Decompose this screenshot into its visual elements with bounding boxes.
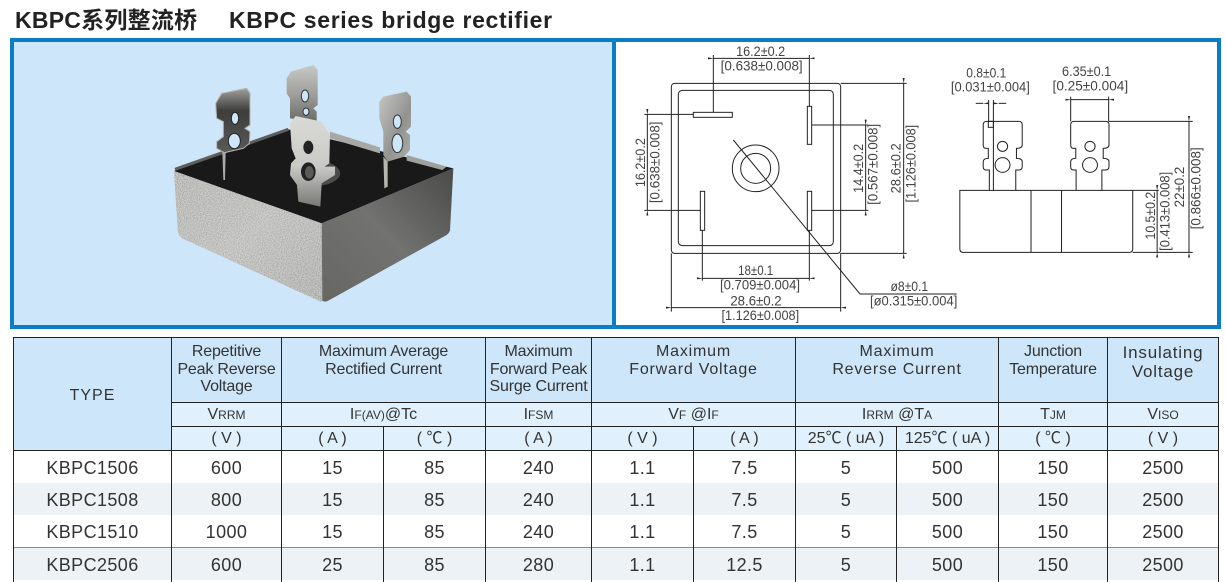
row: KBPC1508: 15 [322,490,343,510]
row: KBPC2506: 5 [841,555,851,575]
row: KBPC2506: 1.1 [629,555,656,575]
dimension: overall width: [1.126±0.008] [721,307,799,323]
product photo: bridge rectifier [174,65,453,302]
table header: parameter names: Voltage [1132,362,1194,381]
table header: units: ( A ) [524,430,553,446]
dimension: body height [1142,172,1172,252]
specification table [13,337,1219,582]
table header: parameter names: Rectified Current [325,360,442,378]
table header: parameter names [14,338,1218,580]
table header: units: ( V ) [211,430,242,446]
row: KBPC1508: KBPC1508 [46,490,139,510]
dimension: outer right height [841,83,918,253]
title: KBPC系列整流桥 [15,7,197,33]
row: KBPC1506: 85 [424,458,445,478]
row: KBPC1506: 5 [841,458,851,478]
dimension: hole diameter leader: ø8±0.1 [890,278,928,294]
row: KBPC1506: 1.1 [629,458,656,478]
dimension: terminal thickness: 0.8±0.1 [966,64,1006,80]
dimension: hole diameter leader [733,140,957,308]
table header: parameter names: Reverse Current [832,360,962,378]
table header: parameter names: Repetitive [192,343,261,360]
row: KBPC2506: 85 [424,555,445,575]
panel: product and drawing frame [10,38,1221,329]
row: KBPC1510: 2500 [1142,522,1184,542]
row: KBPC1510: 7.5 [731,522,758,542]
table header: symbols: VF @IF [668,406,719,422]
dimension: terminal spacing [702,230,809,292]
row: KBPC1508 [14,483,1218,515]
table header: parameter names: Maximum [656,343,731,360]
row: KBPC1510: 15 [322,522,343,542]
table header: parameter names: Maximum Average [319,343,448,360]
table header: units: ( ℃ ) [417,430,452,446]
row: KBPC1506: 150 [1037,458,1069,478]
row: KBPC2506: 12.5 [726,555,763,575]
panel divider [612,38,616,329]
table header: units: ( A ) [730,430,759,446]
row: KBPC2506: 600 [211,555,242,575]
row: KBPC2506: 500 [932,555,963,575]
table header: units: ( V ) [627,430,658,446]
row: KBPC1508: 85 [424,490,445,510]
row: KBPC1506: 240 [523,458,554,478]
body outline [960,190,1193,252]
table header: parameter names: Temperature [1009,360,1097,378]
dimension: terminal spacing: [0.709±0.004] [720,276,800,292]
dimension: hole diameter leader: [ø0.315±0.004] [870,292,957,308]
dimension: left height [632,114,700,210]
table header: parameter names: Junction [1024,343,1082,360]
table header: symbols: VRRM [208,406,246,422]
row: KBPC1510: 500 [932,522,963,542]
terminal: front [290,116,335,207]
dimension drawing: side view [951,63,1204,252]
dimension: outer right height: [1.126±0.008] [902,125,918,202]
dimension: body height: 10.5±0.2 [1142,192,1158,239]
row: KBPC1510: 240 [523,522,554,542]
row: KBPC1510: 1.1 [629,522,656,542]
terminal: back right [379,92,411,188]
row: KBPC1506: 7.5 [731,458,758,478]
row: KBPC1508: 1.1 [629,490,656,510]
dimension: outer right height: 28.6±0.2 [888,143,904,193]
dimension: terminal width: [0.25±0.004] [1053,78,1128,94]
body outlines [671,83,841,253]
table header: units: ( A ) [318,430,347,446]
dimension: top width [713,43,809,112]
dimension: terminal thickness [951,64,1030,121]
dimension: terminal spacing: 18±0.1 [738,262,773,278]
dimension drawing: top view [632,43,957,323]
table header: symbols: IRRM @TA [862,406,932,422]
dimension: terminal thickness: [0.031±0.004] [951,79,1030,95]
dimension: inner right height: [0.567±0.008] [865,124,881,205]
table header: symbols: IF(AV)@Tc [350,406,417,422]
table header: parameter names: Insulating [1123,343,1203,362]
row: KBPC1508: 500 [932,490,963,510]
table header: units: ( V ) [1148,430,1178,446]
table header: parameter names: Voltage [200,378,252,395]
centre washer [290,161,340,186]
dimension: left height: [0.638±0.008] [646,121,662,203]
row: KBPC1510: 150 [1037,522,1069,542]
left terminal outline [983,121,1022,190]
dimension: total height [1109,121,1204,252]
title [15,7,553,33]
table header: symbols: TJM [1040,406,1066,422]
dimension: overall width: 28.6±0.2 [730,292,782,308]
row: KBPC1508: 240 [523,490,554,510]
dimension: overall width [671,253,841,323]
row: KBPC1506: 2500 [1142,458,1184,478]
dimension: top width: [0.638±0.008] [721,58,803,74]
dimension: left height: 16.2±0.2 [632,138,648,187]
row: KBPC1510 [46,522,1184,542]
body right face [322,168,453,302]
table header: parameter names: Peak Reverse [177,360,276,378]
dimension: terminal width [1053,63,1128,121]
right terminal outline [1071,121,1109,190]
dimension: total height: [0.866±0.008] [1187,147,1204,229]
body left face [174,171,322,302]
dimension: inner right height [812,124,881,210]
metal rods at back rim [330,132,447,170]
table header: parameter names: Forward Peak [490,360,587,378]
row: KBPC2506: 25 [322,555,343,575]
row: KBPC1508: 7.5 [731,490,758,510]
row: KBPC1506: 15 [322,458,343,478]
table header: units [172,427,1218,450]
panel: product photo background [14,42,612,325]
table header: parameter names: Surge Current [490,378,587,395]
title: KBPC series bridge rectifier [229,7,553,33]
row: KBPC1506 [46,458,1184,478]
table header: parameter names: Maximum [860,343,934,360]
row: KBPC1506: KBPC1506 [46,458,139,478]
dimension: body height: [0.413±0.008] [1156,172,1172,251]
body top opening [174,129,453,223]
dimension: inner right height: 14.4±0.2 [850,144,866,193]
row: KBPC1510: KBPC1510 [46,522,139,542]
centre hole [732,145,779,192]
row: KBPC1508: 150 [1037,490,1069,510]
row: KBPC2506: 2500 [1142,555,1184,575]
row: KBPC1510: 5 [841,522,851,542]
dimension: terminal width: 6.35±0.1 [1062,63,1111,79]
terminal: back left [216,88,250,180]
table header: parameter names: TYPE [70,387,115,404]
table header: symbols [172,403,1218,426]
table header: symbols: IFSM [524,406,553,422]
row: KBPC2506: 280 [523,555,554,575]
table header: units: 25℃ ( uA ) [808,430,884,446]
row: KBPC2506: KBPC2506 [46,555,139,575]
row: KBPC1508: 5 [841,490,851,510]
table header: units: ( ℃ ) [1035,430,1071,446]
row: KBPC1510: 85 [424,522,445,542]
table header: symbols: VISO [1147,406,1179,422]
row: KBPC1508: 800 [211,490,242,510]
row: cropped continuation [14,580,1219,582]
row: KBPC1510: 1000 [206,522,247,542]
row: KBPC1506: 500 [932,458,963,478]
table header: parameter names: Forward Voltage [629,360,758,378]
row: KBPC1508: 2500 [1142,490,1184,510]
row: KBPC1506: 600 [211,458,242,478]
terminal: back centre [287,65,318,122]
row: KBPC2506: 150 [1037,555,1069,575]
dimension: total height: 22±0.2 [1171,167,1187,207]
dimension: top width: 16.2±0.2 [736,43,785,59]
terminal slots [693,106,812,230]
table header: units: 125℃ ( uA ) [905,430,990,446]
row: KBPC2506 [14,548,1218,580]
table header: parameter names: Maximum [505,343,572,360]
